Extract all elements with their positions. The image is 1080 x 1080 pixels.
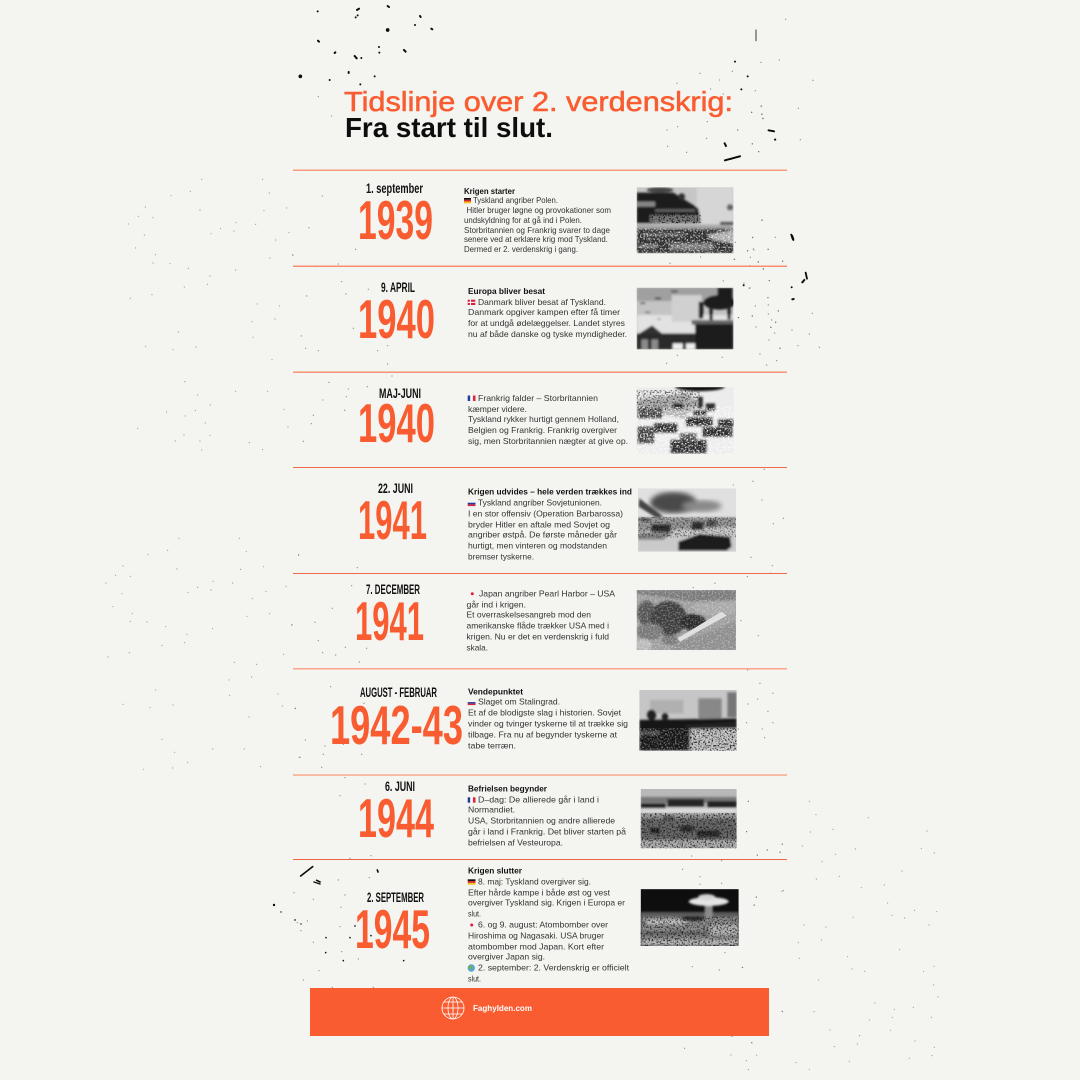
text block: Krigen udvides: angriber østpå. De første måneder går [468,530,617,540]
text block: Befrielsen begynder: Normandiet. [468,806,515,814]
text block: Befrielsen begynder: befrielsen af Vesteuropa. [468,838,563,848]
date: 2. SEPTEMBER: 2. SEPTEMBER [367,890,424,905]
text block: Befrielsen begynder: D–dag: De allierede går i land i [478,794,599,804]
photo: atomic mushroom cloud [640,889,739,946]
text block: Frankrig falder: sig, men Storbritannien nægter at give op. [468,437,628,446]
text block: Europa bliver besat: Europa bliver besat [468,287,545,296]
text block: Krigen starter: Storbritannien og Frankrig svarer to dage [464,226,610,235]
text block: Krigen slutter: 8. maj: Tyskland overgiver sig. [478,878,591,886]
text block: Vendepunktet: Et af de blodigste slag i historien. Sovjet [468,708,622,718]
date: 7. DECEMBER: 7. DECEMBER [366,582,420,597]
text block: Krigen starter: Tyskland angriber Polen. [473,196,558,205]
date: 9. APRIL: 9. APRIL [381,280,415,295]
text block: Pearl Harbor: Et overraskelsesangreb mod den [466,610,591,620]
text block: Krigen slutter: Hiroshima og Nagasaki. USA bruger [468,932,604,940]
date: MAJ-JUNI: MAJ-JUNI [379,386,421,401]
text block: Vendepunktet [468,688,628,750]
text block: Krigen starter: Krigen starter [464,187,516,196]
text block: Befrielsen begynder: Befrielsen begynder [468,784,548,794]
year: 1941: 1941 [355,590,424,652]
text block: Krigen starter: Dermed er 2. verdenskrig i gang. [464,245,578,254]
title: Tidslinje over 2. verdenskrig: [344,86,733,117]
year: 1942-43: 1942-43 [330,694,463,756]
text block: Krigen udvides: bremser tyskerne. [468,552,534,562]
text block: Krigen slutter [468,866,630,984]
text block: Krigen slutter: overgiver Japan sig. [468,952,545,962]
year: 1945: 1945 [355,898,430,960]
text block: Krigen slutter: atombomber mod Japan. Kort efter [468,942,604,952]
text block: Krigen slutter: slut. [468,974,481,984]
text block: Pearl Harbor [466,590,616,652]
text block: Pearl Harbor: amerikanske flåde trækker USA med i [466,620,609,630]
text block: Vendepunktet: tabe terræn. [468,742,516,750]
text block: Pearl Harbor: Japan angriber Pearl Harbor – USA [479,590,616,598]
photo: D-Day beach [640,789,737,848]
year: 1941: 1941 [358,489,427,551]
timeline row: 2. september 1945 [355,866,739,984]
text block: Vendepunktet: tilbage. Fra nu af begynder tyskerne at [468,730,618,740]
text block: Europa bliver besat: for at undgå ødelæggelser. Landet styres [468,318,625,328]
timeline row: 6. juni 1944 [358,779,737,849]
photo: statue and planes [636,288,734,350]
text block: Frankrig falder: Tyskland rykker hurtigt gennem Holland, [468,415,619,424]
icon: globe [442,997,464,1019]
date: 22. JUNI: 22. JUNI [378,481,413,496]
text block: Krigen slutter: 6. og 9. august: Atombomber over [478,920,608,930]
photo: tanks on open ground [636,387,734,454]
text block: Frankrig falder: Frankrig falder – Storbritannien [478,394,598,403]
year: 1940: 1940 [358,288,435,350]
text block: Krigen udvides: bryder Hitler en aftale med Sovjet og [468,520,610,530]
photo: tank [636,187,734,254]
text block: Europa bliver besat [468,287,627,339]
text block: Krigen udvides: Krigen udvides – hele verden trækkes ind [468,488,632,496]
text block: Frankrig falder: kæmper videre. [468,405,527,414]
text block: Europa bliver besat: Danmark opgiver kampen efter få timer [468,307,620,317]
photo: burning tanks on the steppe [638,488,736,552]
text block: Krigen starter: Hitler bruger løgne og provokationer som [466,206,611,215]
year: 1940: 1940 [358,392,435,454]
date: 6. JUNI: 6. JUNI [385,779,415,794]
text block: Europa bliver besat: nu af både danske og tyske myndigheder. [468,329,627,339]
text block: Vendepunktet: vinder og tvinger tyskerne til at trække sig [468,720,628,728]
timeline row: 1942-43 [330,685,737,756]
text block: Pearl Harbor: går ind i krigen. [466,600,526,610]
text block: Befrielsen begynder [468,784,626,848]
text block: Krigen slutter: slut. [468,910,481,918]
text block: Krigen udvides: Tyskland angriber Sovjetunionen. [478,498,602,508]
footer banner [310,988,769,1036]
text block: Befrielsen begynder: USA, Storbritannien og andre allierede [468,816,615,826]
text block: Frankrig falder [468,394,628,446]
text block: Krigen starter: senere ved at erklære krig mod Tyskland. [464,235,608,244]
year: 1944: 1944 [358,787,434,849]
text block: Europa bliver besat: Danmark bliver besat af Tyskland. [478,298,606,307]
title: Fra start til slut. [345,112,553,143]
text block: Krigen starter: undskyldning for at gå ind i Polen. [464,215,582,225]
timeline row: 7. december 1941 [355,582,736,652]
timeline row: 22. juni 1941 [358,481,736,562]
timeline row: maj-juni 1940 [358,382,734,454]
text block: Krigen slutter: Efter hårde kampe i både øst og vest [468,888,611,898]
text block: Krigen slutter: overgiver Tyskland sig. Krigen i Europa er [468,898,625,908]
text block: Pearl Harbor: skala. [466,644,488,652]
title [344,86,733,143]
text block: Vendepunktet: Vendepunktet [468,688,523,696]
text block: Krigen slutter: 2. september: 2. Verdenskrig er officielt [478,964,630,972]
text block: Krigen udvides: I en stor offensiv (Operation Barbarossa) [468,510,623,518]
text block: Krigen starter [464,187,611,254]
text block: Krigen udvides [468,488,632,562]
year: 1939: 1939 [358,189,433,251]
text block: Vendepunktet: Slaget om Stalingrad. [478,698,560,706]
date: 1. september: 1. september [366,181,424,196]
text block: Pearl Harbor: krigen. Nu er det en verdenskrig i fuld [466,632,609,642]
photo: Stalingrad ruins [639,690,737,751]
text block: Krigen udvides: hurtigt, men vinteren og modstanden [468,542,607,550]
text block: Befrielsen begynder: går i land i Frankrig. Det bliver starten på [468,826,626,836]
photo: Pearl Harbor smoke [636,590,736,650]
text block: Krigen slutter: Krigen slutter [468,866,523,876]
date: AUGUST - FEBRUAR: AUGUST - FEBRUAR [360,685,437,700]
timeline row: 9. april 1940 [358,280,735,350]
text block: Frankrig falder: Belgien og Frankrig. Frankrig overgiver [468,426,617,435]
timeline row: 1939 [358,181,733,254]
website label: Faghylden.com [473,1003,532,1013]
